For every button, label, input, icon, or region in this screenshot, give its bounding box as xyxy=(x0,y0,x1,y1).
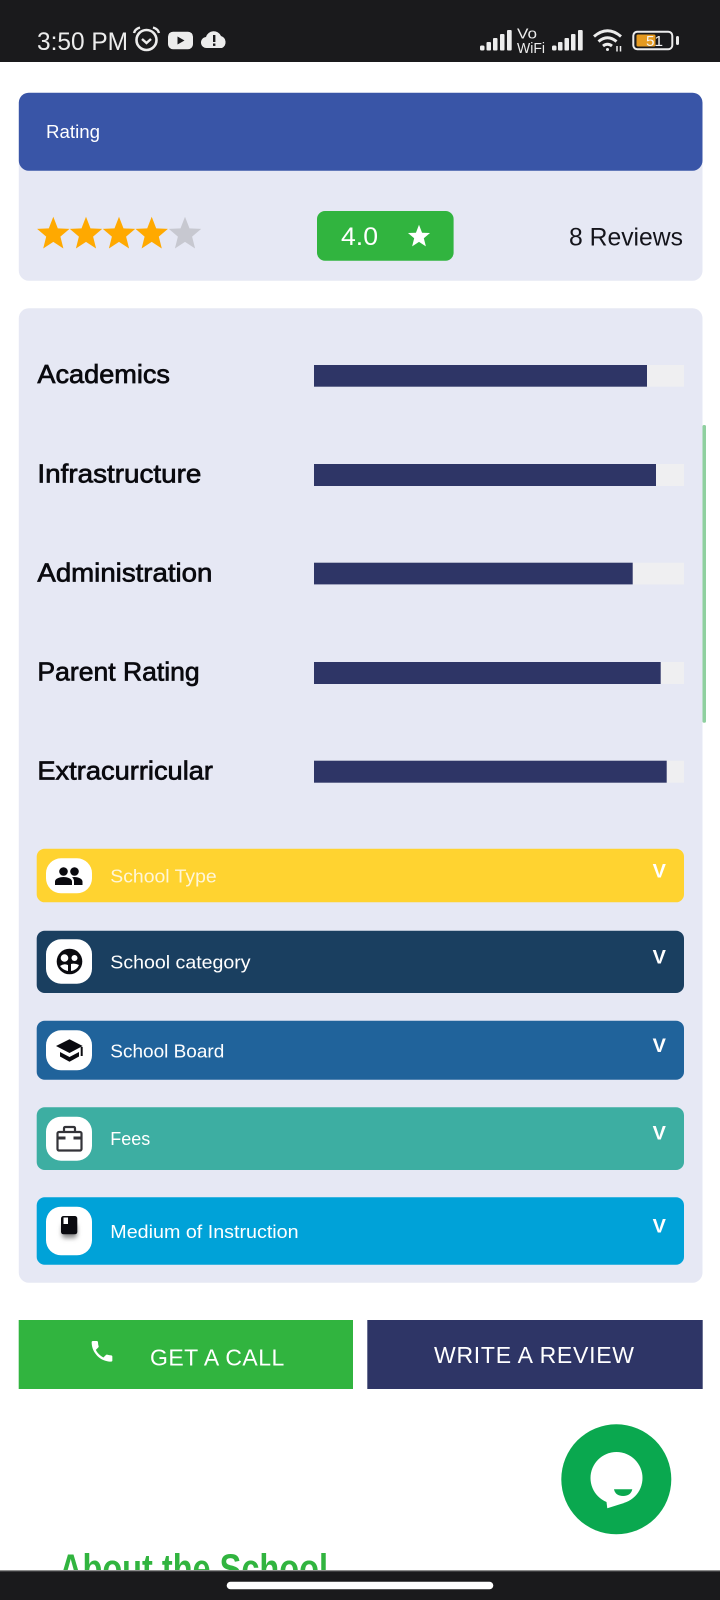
accordion: School Type: V xyxy=(653,862,666,882)
scrollbar xyxy=(702,425,706,723)
accordion: School Board: School Board xyxy=(110,1040,224,1061)
row: Parent Rating: Parent Rating xyxy=(37,657,200,687)
button: write a review: WRITE A REVIEW xyxy=(434,1342,634,1368)
navigation bar xyxy=(0,1570,720,1600)
icon: cloud alert xyxy=(201,31,226,48)
row: Administration xyxy=(37,558,684,588)
chat button xyxy=(561,1424,671,1534)
icon: wifi xyxy=(594,31,621,52)
icon: battery: 51 xyxy=(646,33,663,50)
button: get a call xyxy=(19,1320,353,1389)
accordion: Fees: Fees xyxy=(110,1128,150,1149)
icon: signal one xyxy=(480,30,512,50)
icon: signal two xyxy=(552,30,583,50)
heading: About the School: About the School xyxy=(59,1547,328,1591)
heading: Rating: Rating xyxy=(46,122,100,142)
row: Extracurricular xyxy=(37,756,684,786)
icon: graduation cap xyxy=(56,1039,83,1062)
icon: video app xyxy=(168,32,193,49)
icon: people xyxy=(55,867,82,885)
row: Academics xyxy=(37,359,684,389)
icon: category xyxy=(57,949,82,974)
accordion: Fees: V xyxy=(653,1124,666,1144)
accordion: School category: School category xyxy=(110,951,251,972)
row: Infrastructure: Infrastructure xyxy=(37,458,201,488)
button: get a call: GET A CALL xyxy=(150,1345,285,1371)
accordion: School category xyxy=(37,931,684,993)
accordion: Medium of Instruction: V xyxy=(653,1216,666,1238)
icon: battery xyxy=(633,32,679,50)
icon: briefcase xyxy=(58,1127,82,1150)
rating badge xyxy=(317,211,454,261)
accordion: Fees xyxy=(37,1107,684,1170)
status time: 3:50 PM xyxy=(37,28,128,56)
panel: rating summary xyxy=(19,93,703,281)
row: Administration: Administration xyxy=(37,558,212,588)
icon: phone xyxy=(92,1341,112,1362)
home indicator xyxy=(227,1582,493,1589)
row: Academics: Academics xyxy=(37,359,170,389)
icon: VoWiFi xyxy=(517,26,545,57)
button: write a review xyxy=(367,1320,703,1389)
rating header xyxy=(19,93,703,171)
panel: rating breakdown xyxy=(19,308,703,1283)
icon: alarm clock xyxy=(134,28,159,50)
rating badge: 4.0 xyxy=(341,223,378,251)
review count: 8 Reviews xyxy=(569,224,683,252)
row: Extracurricular: Extracurricular xyxy=(37,756,213,786)
icon: book xyxy=(61,1216,77,1238)
accordion: School Board: V xyxy=(653,1036,666,1057)
accordion: Medium of Instruction xyxy=(37,1197,684,1265)
status bar xyxy=(0,0,720,62)
accordion: School Board xyxy=(37,1021,684,1080)
icon: VoWiFi: Vo xyxy=(517,26,537,42)
row: Infrastructure xyxy=(37,458,684,488)
row: Parent Rating xyxy=(37,657,684,687)
accordion: School category: V xyxy=(653,947,666,968)
icon: VoWiFi: WiFi xyxy=(517,40,545,57)
accordion: Medium of Instruction: Medium of Instruction xyxy=(110,1221,299,1242)
accordion: School Type xyxy=(37,849,684,902)
accordion: School Type: School Type xyxy=(110,865,217,886)
star rating xyxy=(37,217,201,248)
